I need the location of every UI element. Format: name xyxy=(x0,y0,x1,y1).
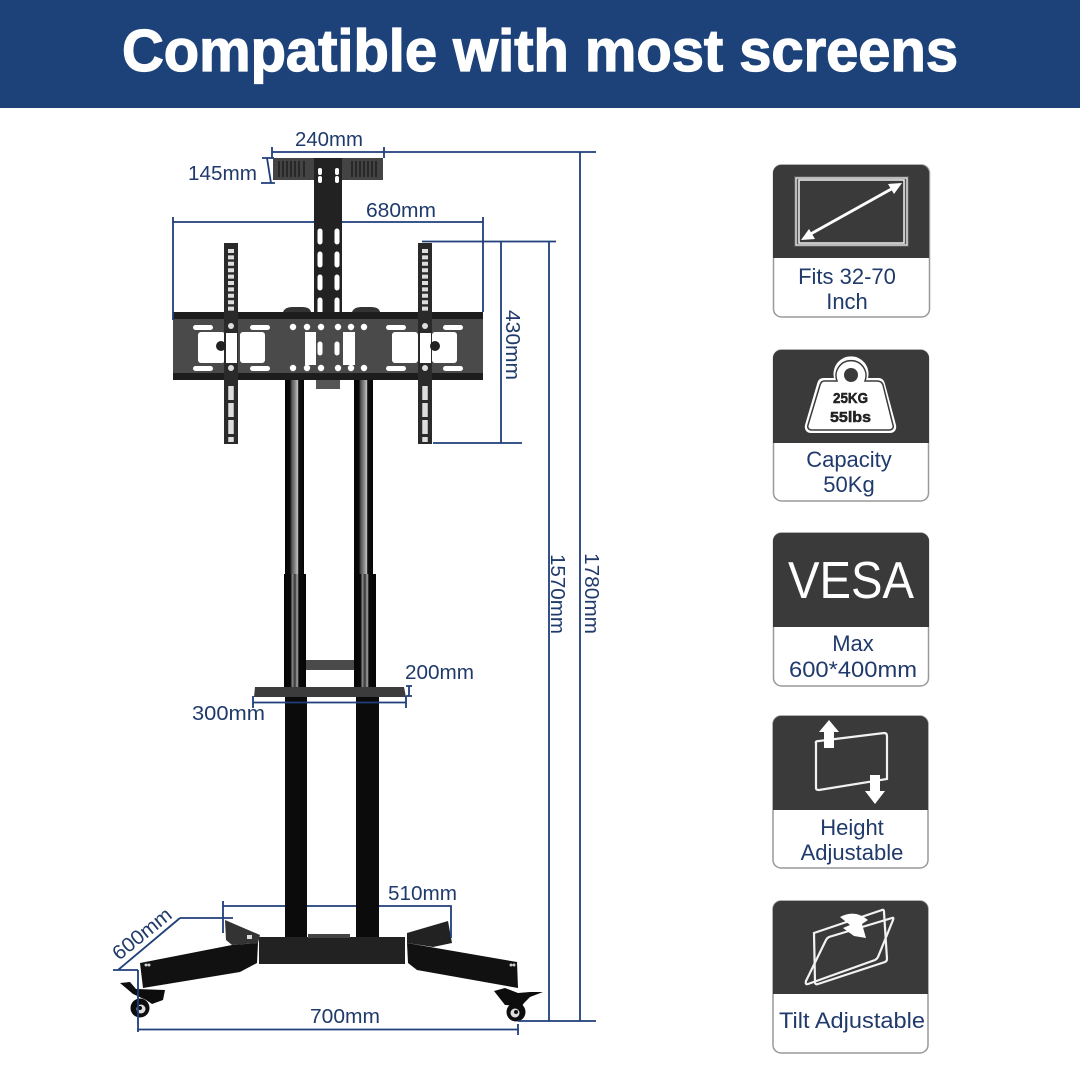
caption: Max xyxy=(832,631,874,656)
icon: height arrows xyxy=(816,720,887,804)
label: 240mm: 240mm xyxy=(295,129,363,151)
base xyxy=(140,920,518,988)
caption: Fits 32-70 xyxy=(798,264,896,289)
tv stand product illustration xyxy=(120,158,543,1022)
label: 700mm: 700mm xyxy=(310,1006,380,1028)
label: 145mm: 145mm xyxy=(188,163,257,185)
left caster xyxy=(120,982,165,1018)
pole cross bar xyxy=(306,660,354,670)
icon: weight xyxy=(805,356,896,433)
right caster xyxy=(494,988,543,1022)
card: height adjustable: Adjustable xyxy=(801,840,903,865)
card: vesa: 600*400mm xyxy=(789,657,917,682)
icon: weight: 55lbs xyxy=(830,409,871,426)
middle shelf xyxy=(254,687,406,697)
card: tilt adjustable xyxy=(773,901,928,1053)
label: 1570mm: 1570mm xyxy=(546,554,568,634)
card: fits 32-70 inch: Inch xyxy=(826,289,868,314)
right tilt bracket xyxy=(418,243,440,444)
card: capacity xyxy=(773,350,929,501)
card: capacity: 50Kg xyxy=(823,472,875,497)
label: 300mm: 300mm xyxy=(192,703,265,725)
label: 510mm: 510mm xyxy=(388,883,457,905)
lower poles xyxy=(285,696,379,942)
icon: tilted frames xyxy=(806,910,893,984)
label: 430mm: 430mm xyxy=(501,310,523,380)
vertical mount plate xyxy=(314,158,342,313)
caption: Tilt Adjustable xyxy=(779,1008,925,1033)
dimension lines xyxy=(113,147,596,1035)
upper poles xyxy=(285,380,373,574)
label: 200mm: 200mm xyxy=(405,662,474,684)
icon: vesa wordmark: VESA xyxy=(788,552,914,610)
caption: Height xyxy=(820,815,884,840)
icon: weight: 25KG xyxy=(833,390,868,407)
title: Compatible with most screens xyxy=(122,18,958,84)
label: 600mm: 600mm xyxy=(108,904,177,965)
top tray xyxy=(273,158,383,180)
card: height adjustable xyxy=(773,716,928,868)
left tilt bracket xyxy=(216,243,238,444)
label: 680mm: 680mm xyxy=(366,200,436,222)
label: 1780mm: 1780mm xyxy=(580,553,602,634)
card: fits 32-70 inch xyxy=(773,165,930,317)
card: vesa xyxy=(773,533,929,686)
icon: diagonal screen xyxy=(794,176,909,247)
horizontal mount panel xyxy=(173,307,483,389)
caption: Capacity xyxy=(806,447,892,472)
middle poles xyxy=(284,574,376,687)
header banner xyxy=(0,0,1080,108)
